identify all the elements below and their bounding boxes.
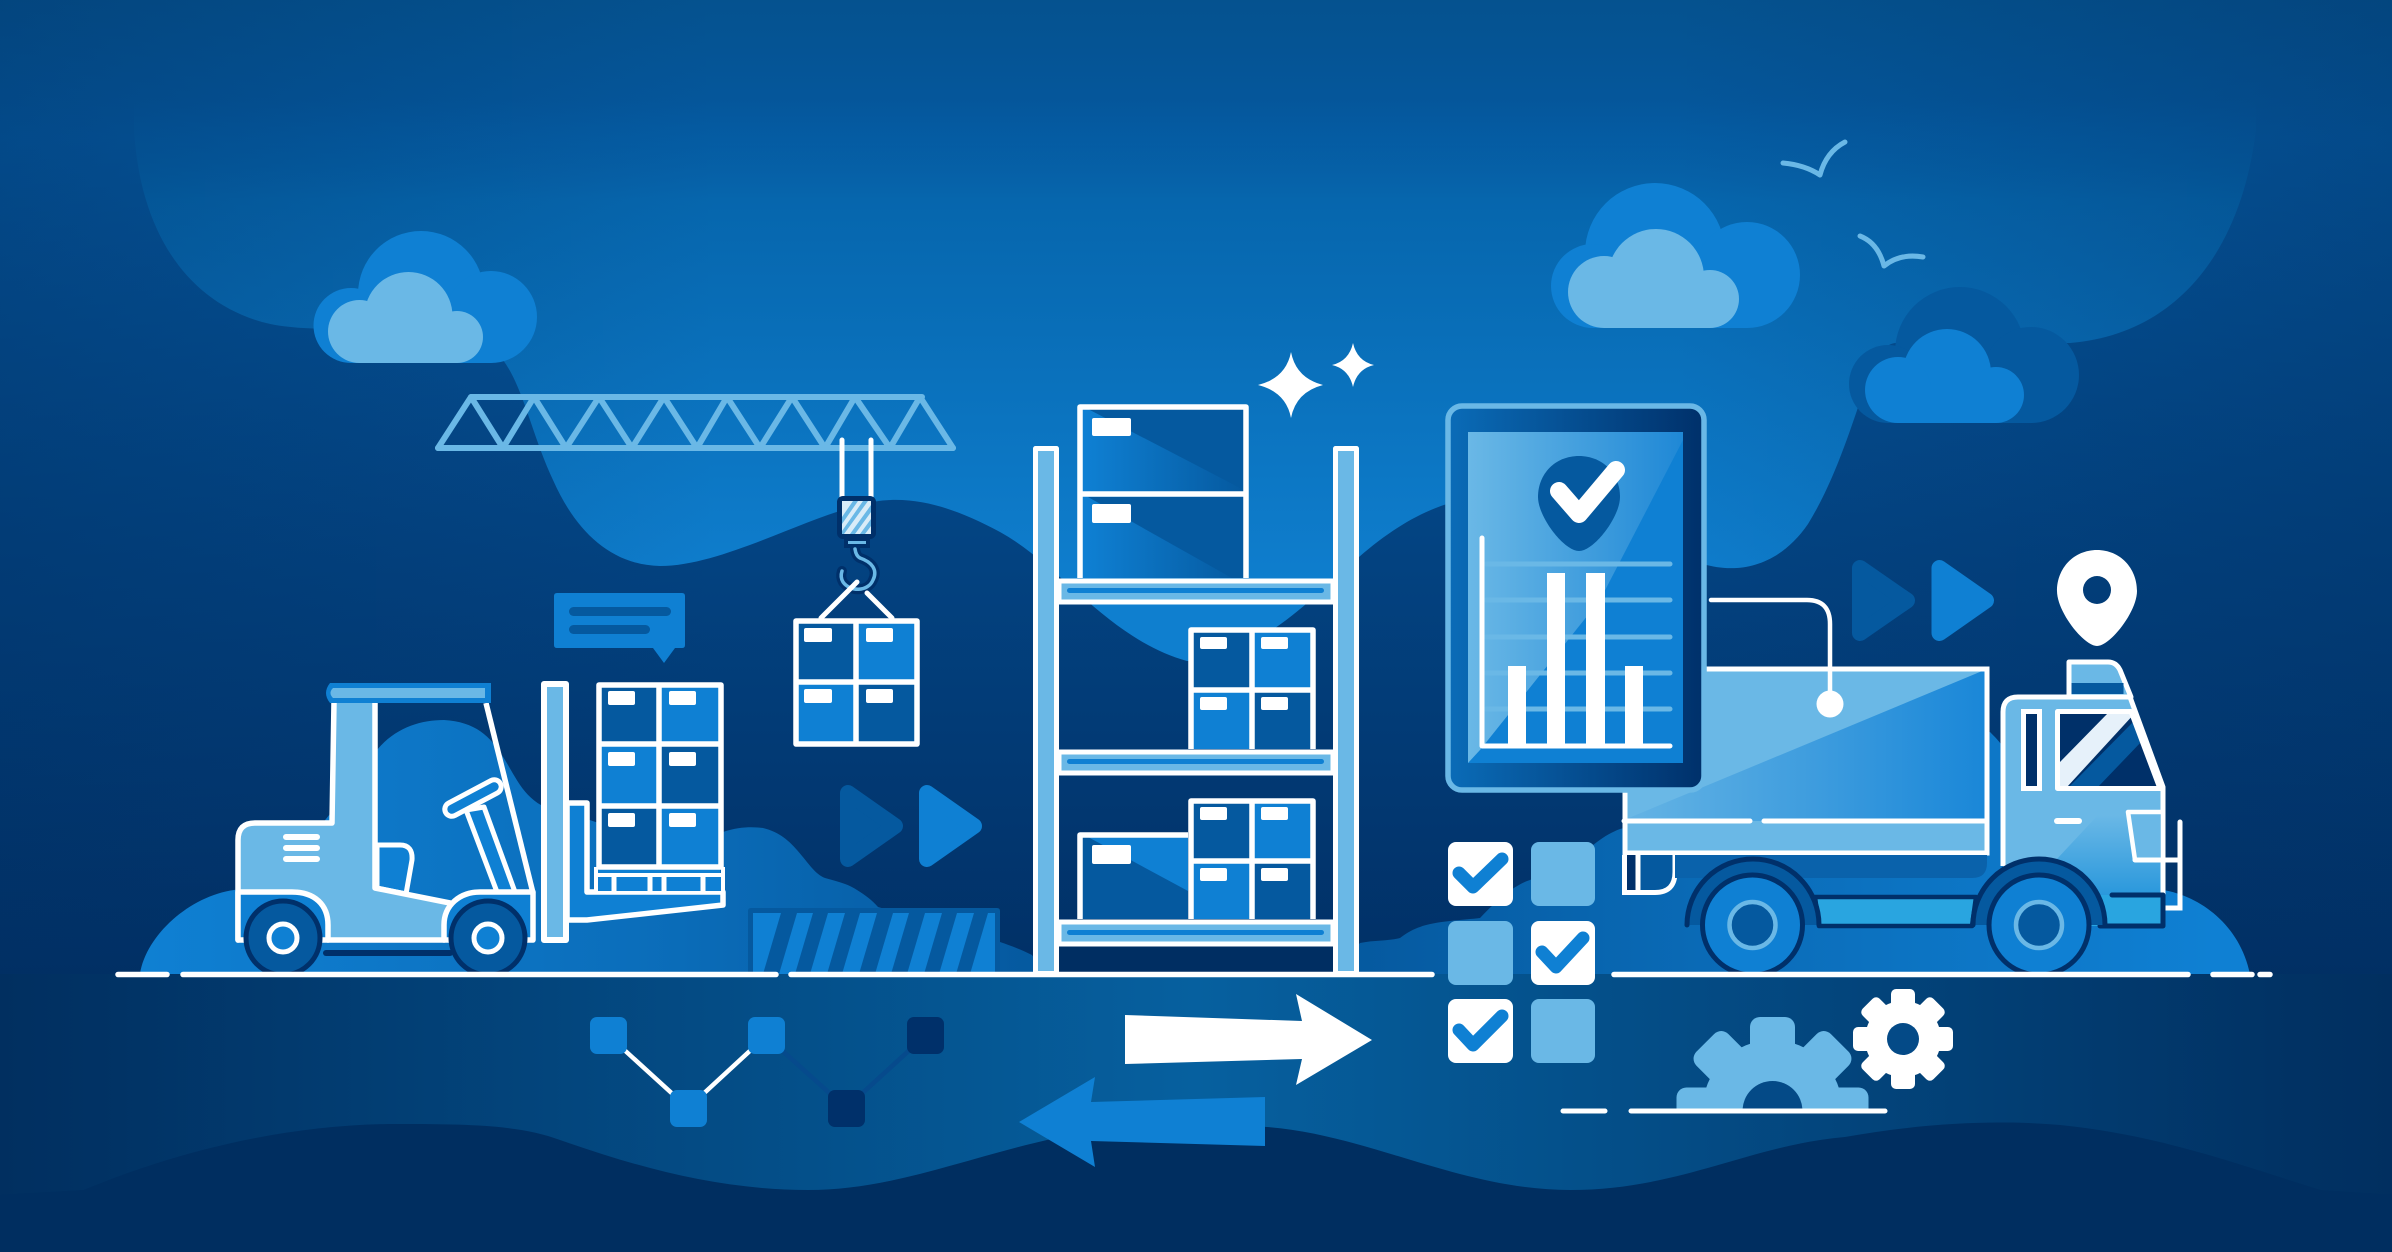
middle shelf boxes	[1191, 630, 1313, 749]
screen	[1468, 432, 1683, 763]
white arrow right	[1125, 994, 1372, 1085]
cab body	[238, 700, 450, 940]
sling	[821, 582, 892, 618]
edge shading	[0, 0, 2392, 974]
rear bumper	[1624, 855, 1675, 892]
connector line	[1711, 600, 1844, 718]
lower shelf low box	[1080, 835, 1188, 919]
rear fender	[238, 892, 328, 940]
front fender	[444, 892, 533, 940]
checklist	[1448, 842, 1595, 1063]
vent lines	[286, 837, 317, 859]
rack zone shade	[1059, 946, 1333, 974]
cloud: far right	[1849, 287, 2079, 423]
cloud far right inner	[1865, 329, 2024, 423]
seat	[377, 845, 412, 894]
front bumper	[2090, 895, 2163, 926]
shelf board middle	[1059, 752, 1333, 773]
lower shelf boxes	[1191, 801, 1313, 919]
cloud upper right outer	[1551, 183, 1800, 328]
play arrows upper	[1860, 568, 1986, 633]
pin with check	[1538, 456, 1620, 551]
side window	[2024, 712, 2040, 788]
cab light diagonal	[2003, 825, 2088, 866]
roof	[326, 683, 491, 703]
half gear	[1676, 1017, 1868, 1108]
row one	[1448, 842, 1595, 906]
top large boxes	[1080, 407, 1246, 578]
chart axes	[1482, 538, 1670, 746]
headlight	[2128, 812, 2163, 860]
birds	[1783, 142, 1923, 266]
ground band with waves	[0, 974, 2392, 1252]
cloud left outer	[314, 231, 537, 363]
cloud: upper right	[1551, 183, 1800, 328]
rear guard	[486, 703, 533, 893]
cloud upper right inner	[1568, 229, 1739, 328]
right upright	[1336, 448, 1356, 974]
door handle	[2057, 818, 2079, 824]
forklift	[238, 683, 723, 975]
hanging boxes	[796, 621, 917, 744]
shelf board top	[1059, 581, 1333, 602]
blue arrow left	[1019, 1077, 1265, 1167]
hook block	[837, 496, 876, 548]
crane hook with load	[796, 440, 917, 744]
left upright	[1036, 448, 1056, 974]
rear wheel	[1687, 859, 1819, 975]
hook	[841, 549, 875, 589]
cloud left inner	[328, 272, 483, 363]
gear base line	[1563, 1108, 1885, 1114]
white gear	[1853, 989, 1953, 1089]
speech bubble	[554, 593, 685, 663]
pallet boxes	[599, 685, 721, 867]
wheel rear	[246, 901, 320, 975]
cloud: left	[314, 231, 537, 363]
left hills	[140, 720, 1045, 974]
truck	[1624, 662, 2180, 975]
hatched container	[748, 908, 1000, 974]
bar chart	[1508, 573, 1643, 746]
play arrows lower	[848, 793, 974, 859]
location pin	[2057, 550, 2137, 646]
windshield	[2058, 712, 2160, 788]
axle	[323, 950, 453, 956]
sky blob	[134, 100, 2256, 661]
cloud far right outer	[1849, 287, 2079, 423]
front wheel	[1973, 859, 2105, 975]
cab	[2003, 662, 2180, 926]
chassis shadow	[1675, 855, 1987, 878]
wheel front	[451, 901, 525, 975]
crane truss	[438, 397, 953, 448]
fork carriage	[567, 803, 723, 920]
tablet	[1448, 406, 1704, 790]
front rail	[2135, 822, 2180, 908]
shelf rack	[1036, 407, 1356, 974]
right hills	[1330, 732, 2250, 974]
row two	[1448, 921, 1595, 985]
row three	[1448, 999, 1595, 1063]
cargo box	[1624, 669, 1987, 853]
steering column	[442, 777, 515, 892]
cab upper visor	[2069, 662, 2131, 697]
mast	[544, 684, 566, 940]
cables	[842, 440, 871, 498]
underbar	[1815, 897, 1976, 926]
network nodes	[590, 1017, 944, 1127]
pallet	[596, 867, 723, 892]
grid lines	[1486, 564, 1670, 709]
ground line	[118, 972, 2270, 977]
sparkle stars	[1258, 343, 1374, 418]
shelf board bottom	[1059, 922, 1333, 944]
cab body	[2003, 697, 2163, 900]
